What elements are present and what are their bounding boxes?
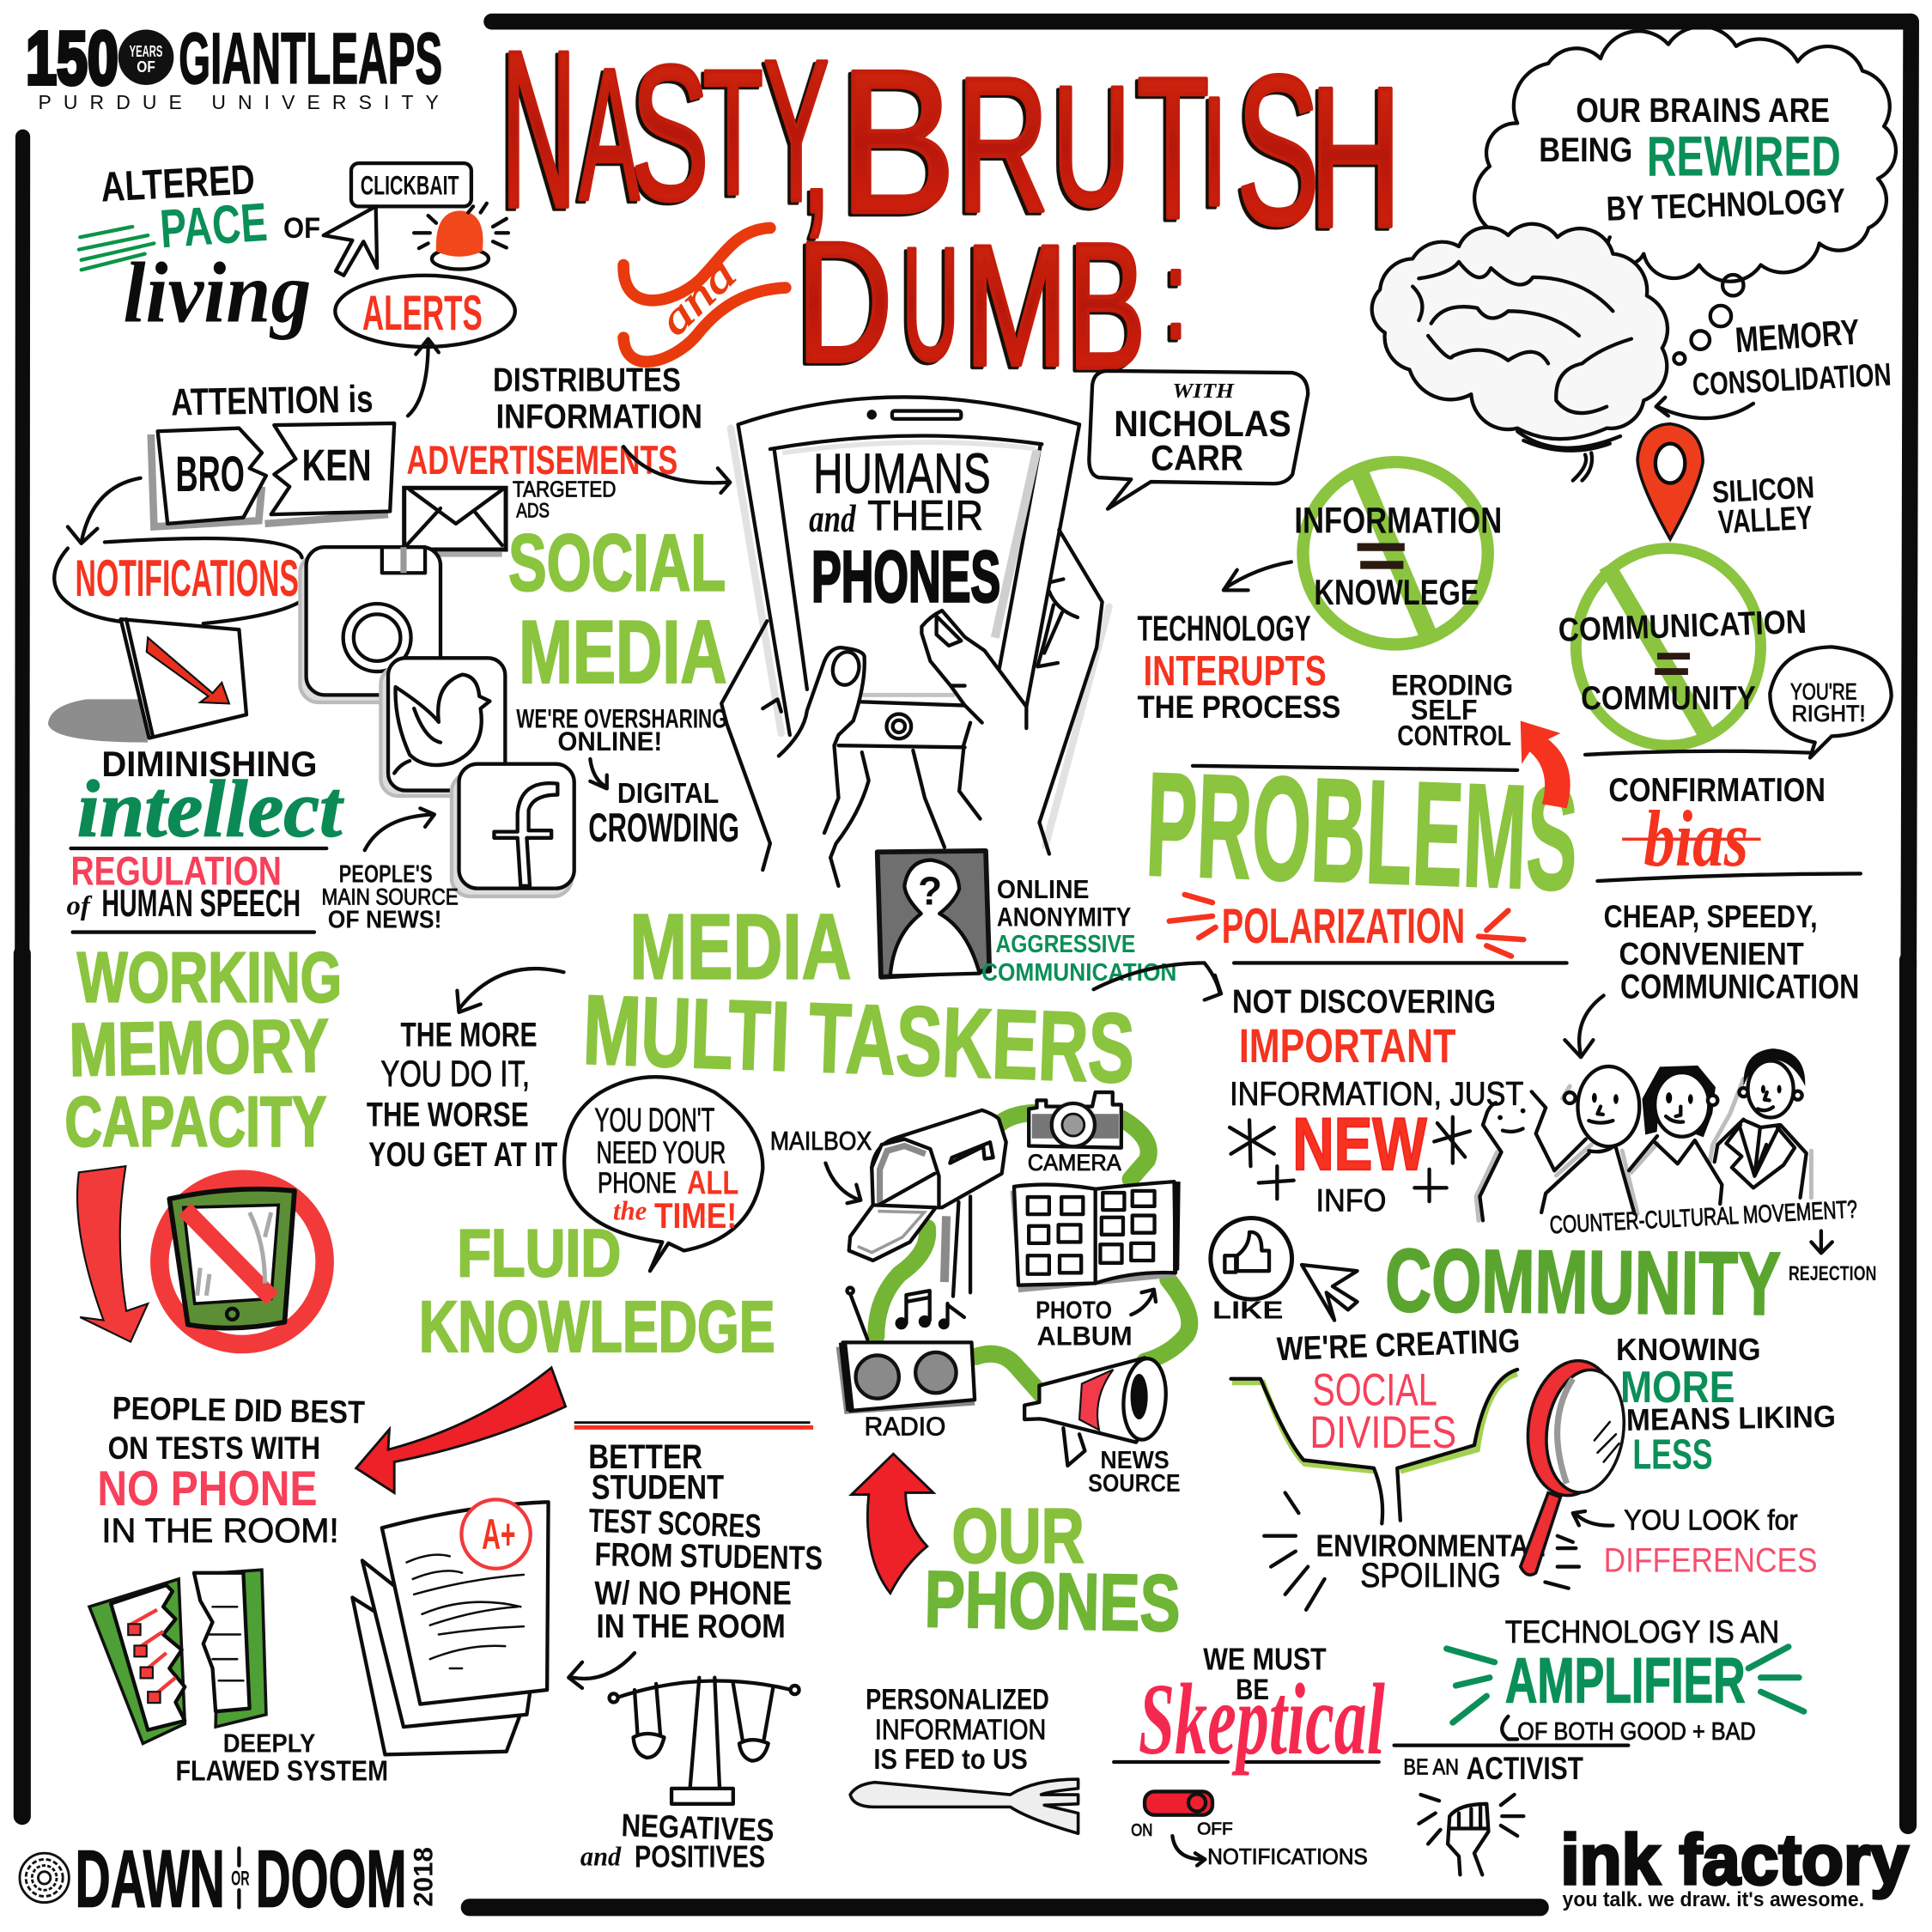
text: we must be skeptical: WE MUST [1203, 1642, 1327, 1676]
title: Nasty, Brutish: Y [763, 18, 829, 243]
speech bubble: you're right: YOU'RE [1790, 677, 1857, 704]
text: be an activist: ACTIVIST [1467, 1750, 1583, 1786]
heading: social media [508, 518, 727, 702]
text: diminishing intellect regulation: of [66, 890, 93, 920]
text: rejection: REJECTION [1789, 1262, 1876, 1285]
illustration: hands holding phone [721, 397, 1109, 886]
text: the more you do it: THE WORSE [367, 1096, 529, 1134]
heading: fluid knowledge: FLUID [457, 1217, 621, 1291]
text: you look for differences: YOU LOOK for [1624, 1504, 1798, 1536]
frame: bottom border left [470, 1895, 1540, 1919]
title: Nasty, Brutish: , [801, 33, 832, 253]
title: Nasty, Brutish [501, 4, 1401, 269]
text: targeted ads: ADS [516, 500, 550, 523]
frame: right border lower [1896, 960, 1920, 1826]
text: digital crowding: CROWDING [588, 805, 739, 851]
sign: information is not knowledge: KNOWLEGE [1314, 572, 1479, 612]
label: photo album [1036, 1290, 1156, 1351]
text: distributes information [493, 362, 702, 436]
logo: dawn or doom: OR [231, 1868, 250, 1891]
text: people's main source of news: OF NEWS! [328, 907, 441, 934]
arrow: broken to notifications [68, 478, 141, 544]
text: altered pace of living: PACE [158, 192, 270, 259]
icon: graded paper stack [352, 1499, 549, 1754]
speech bubble: with Nicholas Carr [1089, 371, 1308, 509]
icon: envelope [404, 488, 506, 555]
text: diminishing intellect regulation: DIMINISHING [101, 744, 318, 784]
icon: photo album [1011, 1182, 1179, 1292]
text: targeted ads [513, 477, 617, 523]
label: alerts: ALERTS [362, 286, 483, 341]
text: not discovering important: NEW [1292, 1103, 1427, 1186]
heading: problems [1144, 742, 1580, 921]
text: advertisements: ADVERTISEMENTS [407, 438, 677, 483]
text: digital crowding [588, 777, 739, 851]
speech bubble: with Nicholas Carr: CARR [1151, 437, 1243, 477]
text: deeply flawed system: FLAWED SYSTEM [175, 1755, 388, 1787]
label: news source [1088, 1447, 1181, 1498]
logo: 150 years of giant leaps: PURDUE UNIVERSITY [38, 91, 439, 113]
text: environmental spoiling [1316, 1528, 1545, 1595]
label: notifications: NOTIFICATIONS [76, 549, 299, 607]
speech bubble: you don't need your phone: PHONE [598, 1167, 677, 1200]
illustration: hands holding phone: and [809, 496, 856, 540]
text: better student test scores: TEST SCORES [588, 1503, 762, 1546]
text: the more you do it: YOU GET AT IT [368, 1135, 558, 1174]
label: like: LIKE [1212, 1297, 1284, 1324]
text: we're creating social divides: WE'RE CREATING [1276, 1322, 1521, 1368]
label: clickbait [351, 163, 471, 206]
heading: social media: MEDIA [519, 603, 727, 702]
text: media multitaskers: MEDIA [629, 895, 852, 998]
text: cheap speedy convenient: CHEAP, SPEEDY, [1604, 898, 1818, 934]
label: news source: SOURCE [1088, 1470, 1181, 1498]
text: altered pace of living [79, 156, 320, 341]
speech bubble: you're right: RIGHT! [1791, 700, 1866, 726]
sign: information is not knowledge: INFORMATION [1294, 501, 1502, 542]
icon: no phone sign [160, 1179, 325, 1345]
speech bubble: you don't need your phone: TIME! [654, 1195, 737, 1236]
text: confirmation bias: CONFIRMATION [1608, 772, 1826, 809]
text: we're creating social divides: DIVIDES [1309, 1407, 1456, 1458]
title: Nasty, Brutish: I [1201, 66, 1227, 238]
icon: music notes [897, 1291, 964, 1327]
text: technology interupts the process [1137, 608, 1340, 725]
text: technology is an amplifier: OF BOTH GOOD + BAD [1517, 1718, 1756, 1746]
text: digital crowding: DIGITAL [617, 777, 719, 809]
icon: red up arrow [852, 1454, 933, 1593]
text: be an activist [1403, 1750, 1583, 1786]
thought cloud: brains rewired [1474, 27, 1896, 282]
heading: fluid knowledge: KNOWLEDGE [419, 1285, 775, 1367]
text: knowing more means liking less: MORE [1620, 1362, 1735, 1412]
speech bubble: you don't need your phone: NEED YOUR [597, 1136, 726, 1170]
icon: thought bubbles [1674, 275, 1743, 364]
text: not discovering important: NOT DISCOVERING [1232, 984, 1496, 1021]
heading: social media: SOCIAL [508, 518, 726, 607]
text: better student test scores [588, 1437, 823, 1645]
text: we must be skeptical: BE [1236, 1674, 1269, 1706]
text: knowing more means liking less: MEANS LIKING [1626, 1400, 1836, 1437]
text: media multitaskers [581, 895, 1136, 1104]
label: photo album: ALBUM [1037, 1320, 1133, 1351]
label: notifications [54, 538, 302, 623]
text: negatives and positives [580, 1807, 775, 1874]
thought cloud: brains rewired: REWIRED [1647, 124, 1841, 187]
text: oversharing online: ONLINE! [557, 726, 662, 756]
icon: torn checklist [89, 1570, 266, 1743]
text: we must be skeptical: Skeptical [1139, 1663, 1385, 1776]
heading: community: COMMUNITY [1385, 1231, 1781, 1334]
title: Dumb: : [1164, 224, 1188, 365]
text: altered pace of living: living [123, 245, 311, 341]
logo: ink factory: you talk. we draw. it's awesome. [1563, 1889, 1864, 1911]
title: Nasty, Brutish: S [631, 27, 709, 240]
arrow: communication to people [1564, 995, 1604, 1057]
text: people did best: NO PHONE [97, 1461, 318, 1516]
text: diminishing intellect regulation: intellect [77, 765, 344, 854]
text: better student test scores: W/ NO PHONE [594, 1575, 792, 1612]
text: negatives and positives: POSITIVES [635, 1840, 765, 1874]
text: knowing more means liking less [1616, 1333, 1836, 1478]
heading: working memory capacity: CAPACITY [64, 1083, 326, 1162]
title: Nasty, Brutish: B [839, 28, 957, 256]
text: people did best: ON TESTS WITH [108, 1430, 320, 1466]
text: eroding self control: CONTROL [1397, 720, 1511, 751]
speech bubble: you don't need your phone: YOU DON'T [594, 1102, 714, 1139]
speech bubble: you don't need your phone: ALL [687, 1164, 738, 1201]
heading: working memory capacity: WORKING [77, 939, 342, 1018]
text: not discovering important: IMPORTANT [1239, 1018, 1455, 1072]
text: online anonymity aggressive communication: COMMUNICATION [981, 959, 1176, 987]
frame: top and left marker border [22, 21, 1910, 966]
text: knowing more means liking less: LESS [1632, 1431, 1713, 1478]
label: photo album: PHOTO [1036, 1297, 1112, 1324]
speech bubble: with Nicholas Carr: WITH [1172, 380, 1235, 403]
online anonymity icon: ? [918, 868, 942, 913]
text: deeply flawed system: DEEPLY [223, 1730, 315, 1759]
text: on off notifications [1131, 1820, 1368, 1869]
text: better student test scores: FROM STUDENTS [594, 1536, 823, 1577]
logo: dawn or doom [20, 1834, 439, 1925]
divider under community sign [1585, 751, 1814, 755]
illustration: hands holding phone: THEIR [867, 493, 983, 539]
heading: our phones: PHONES [924, 1554, 1181, 1648]
text: online anonymity aggressive communication: ONLINE [997, 876, 1090, 904]
text: better student test scores: STUDENT [592, 1468, 724, 1507]
thought cloud: brains rewired: BY TECHNOLOGY [1606, 181, 1846, 228]
illustration: hands holding phone: PHONES [811, 535, 1000, 617]
text: we're creating social divides: SOCIAL [1312, 1365, 1437, 1416]
text: the more you do it: YOU DO IT, [380, 1054, 530, 1095]
speech bubble: you don't need your phone: the [613, 1196, 647, 1226]
text: silicon valley: SILICON [1711, 470, 1815, 509]
text: polarization: POLARIZATION [1222, 899, 1465, 954]
logo: ink factory: ink factory [1560, 1820, 1909, 1899]
broken box: BRO KEN: KEN [302, 440, 372, 490]
text: environmental spoiling: SPOILING [1360, 1556, 1501, 1595]
title: Dumb: D [797, 206, 893, 398]
heading: fluid knowledge [419, 1217, 775, 1367]
logo: 150 years of giant leaps: OF [137, 58, 155, 76]
title: Nasty, Brutish: A [579, 31, 640, 240]
text: people's main source of news [322, 860, 459, 934]
label: clickbait: CLICKBAIT [361, 170, 459, 201]
text: oversharing online: WE'RE OVERSHARING [516, 702, 727, 733]
burst lines: environmental spoiling [1264, 1492, 1579, 1610]
text: technology is an amplifier [1394, 1613, 1804, 1746]
arrow: consolidation to brain [1656, 398, 1753, 418]
heading: working memory capacity [64, 939, 342, 1162]
text: on off notifications: ON [1131, 1821, 1152, 1840]
title: Dumb [797, 206, 1188, 406]
logo: dawn or doom: DAWN [76, 1834, 225, 1925]
online anonymity icon [878, 851, 989, 977]
arrow: media to the more you do it [457, 969, 564, 1012]
text: memory consolidation [1692, 311, 1893, 403]
text: eroding self control: ERODING [1391, 669, 1513, 702]
text: memory consolidation: MEMORY [1734, 311, 1861, 360]
label: radio: RADIO [865, 1413, 945, 1442]
icon: magnifying glass [1520, 1355, 1631, 1575]
text: online anonymity aggressive communication: ANONYMITY [997, 901, 1131, 932]
text: attention is: ATTENTION is [171, 378, 374, 424]
top-right region [1089, 21, 1911, 972]
text: better student test scores: IN THE ROOM [597, 1608, 786, 1645]
icon: sparkle stars [1230, 1117, 1470, 1201]
icon: cursor arrow [324, 206, 377, 276]
title: Dumb: B [1067, 206, 1146, 406]
text: be an activist: BE AN [1403, 1755, 1459, 1779]
bottom-right region [1011, 960, 1909, 1911]
arrow: problems to eroding self control [1521, 720, 1571, 808]
text: cheap speedy convenient [1604, 898, 1818, 972]
green ribbon connecting phone features [876, 1113, 1189, 1394]
text: online anonymity aggressive communication: AGGRESSIVE [995, 931, 1135, 958]
text: eroding self control [1391, 669, 1513, 751]
text: on off notifications: NOTIFICATIONS [1207, 1845, 1368, 1869]
text: technology interupts the process: TECHNOLOGY [1137, 608, 1311, 648]
title: Nasty, Brutish: S [1236, 33, 1320, 269]
title: Nasty, Brutish: N [501, 4, 577, 254]
text: distributes information: DISTRIBUTES [493, 362, 681, 399]
icon: instagram [300, 547, 440, 702]
arrow: room to paper [568, 1653, 635, 1688]
logo: 150 years of giant leaps [26, 16, 442, 113]
arrow: advertisements to phone [623, 447, 730, 493]
icon: graded paper stack: A+ [482, 1510, 516, 1558]
arrow: you look for [1573, 1511, 1613, 1526]
text: distributes information: INFORMATION [496, 398, 702, 436]
sign: information is not knowledge [1294, 462, 1502, 645]
text: knowing more means liking less: KNOWING [1616, 1333, 1761, 1367]
text: cheap speedy convenient: CONVENIENT [1619, 936, 1804, 972]
text: better student test scores: BETTER [588, 1437, 702, 1476]
sign: communication is not community: COMMUNITY [1581, 680, 1756, 717]
icon: balance scale [610, 1678, 799, 1804]
text: technology is an amplifier: AMPLIFIER [1505, 1643, 1746, 1716]
text: diminishing intellect regulation: REGULATION [71, 848, 282, 894]
logo: 150 years of giant leaps: 150 [26, 16, 118, 100]
text: negatives and positives: and [580, 1842, 622, 1872]
text: people did best: IN THE ROOM! [101, 1511, 339, 1550]
icon: cursor [1302, 1265, 1358, 1321]
text: personalized information: INFORMATION [875, 1713, 1046, 1745]
text: silicon valley [1711, 470, 1815, 541]
title: Dumb: M [965, 210, 1067, 402]
title: Dumb: U [902, 214, 959, 393]
heading: our phones: OUR [952, 1494, 1084, 1580]
icon: mailbox [849, 1110, 1006, 1297]
arrow: movement to rejection [1811, 1231, 1832, 1253]
title: and ribbon: and [650, 250, 746, 345]
text: eroding self control: SELF [1411, 694, 1478, 726]
arrow: mailbox label [825, 1163, 860, 1203]
speech bubble: you don't need your phone [564, 1077, 762, 1271]
text: you look for differences [1604, 1504, 1818, 1579]
illustration: social divide canyon [1231, 1370, 1517, 1523]
title: Nasty, Brutish: H [1309, 46, 1401, 269]
logo: 150 years of giant leaps: YEARS [130, 42, 162, 60]
label: mailbox: MAILBOX [770, 1127, 872, 1156]
icon: twitter [380, 658, 505, 796]
label: alerts [335, 276, 515, 347]
text: on off notifications: OFF [1197, 1820, 1233, 1839]
heading: our phones [924, 1494, 1181, 1648]
title: and ribbon [623, 228, 786, 361]
icon: gray smudge and tablet with red arrow [48, 619, 246, 743]
text: people's main source of news: PEOPLE'S [339, 860, 433, 888]
frame: right border [1909, 21, 1911, 966]
icon: location pin [1637, 424, 1703, 539]
text: oversharing online [516, 702, 727, 756]
icon: camera [1029, 1092, 1121, 1148]
text: personalized information [866, 1683, 1049, 1775]
text: the more you do it: THE MORE [400, 1015, 538, 1054]
text: not discovering important [1230, 984, 1523, 1218]
arrow: big red arrow left [356, 1368, 566, 1492]
speech bubble: with Nicholas Carr: NICHOLAS [1114, 404, 1291, 445]
text: diminishing intellect regulation [66, 744, 344, 933]
text: altered pace of living: ALTERED [100, 156, 256, 211]
text: diminishing intellect regulation: HUMAN SPEECH [101, 883, 301, 925]
text: technology interupts the process: THE PROCESS [1137, 689, 1340, 725]
sign: communication is not community: COMMUNICATION [1558, 604, 1807, 649]
illustration: hands holding phone: HUMANS [813, 441, 991, 505]
text: silicon valley: VALLEY [1717, 500, 1814, 541]
text: people's main source of news: MAIN SOURCE [322, 883, 459, 909]
text: polarization [1170, 895, 1567, 963]
title: Nasty, Brutish: R [957, 38, 1049, 252]
logo: dawn or doom: 2018 [408, 1847, 439, 1907]
frame: left border lower [10, 954, 34, 1816]
broken box: BRO KEN [151, 423, 394, 526]
arrow: oversharing to digital crowding [590, 759, 607, 788]
icon: radio [839, 1288, 975, 1411]
text: technology is an amplifier: TECHNOLOGY IS AN [1505, 1613, 1779, 1649]
divider: red and black line [574, 1423, 813, 1427]
label: camera: CAMERA [1028, 1149, 1122, 1176]
top-left region [22, 4, 1910, 966]
arrow: people's main source to facebook [365, 808, 434, 850]
text: we must be skeptical [1114, 1642, 1385, 1776]
text: deeply flawed system [175, 1730, 388, 1787]
title: Nasty, Brutish: T [703, 33, 763, 231]
icon: red down arrow [77, 1166, 148, 1342]
text: you look for differences: DIFFERENCES [1604, 1540, 1818, 1579]
text: we're creating social divides [1276, 1322, 1521, 1458]
text: communication: COMMUNICATION [1620, 967, 1859, 1005]
text: personalized information: IS FED to US [873, 1743, 1028, 1775]
bottom-left region [20, 851, 1540, 1925]
text: confirmation bias [1597, 772, 1861, 884]
text: online anonymity aggressive communication [981, 876, 1176, 987]
text: media multitaskers: MULTI TASKERS [581, 975, 1136, 1104]
text: not discovering important: INFORMATION, JUST [1230, 1076, 1523, 1113]
text: technology interupts the process: INTERUPTS [1144, 648, 1327, 695]
text: environmental spoiling: ENVIRONMENTAL [1316, 1528, 1545, 1563]
text: people did best: PEOPLE DID BEST [112, 1389, 365, 1430]
icon: like thumb [1211, 1218, 1292, 1299]
text: negatives and positives: NEGATIVES [621, 1807, 775, 1848]
text: people did best [97, 1389, 365, 1550]
title: Nasty, Brutish: U [1052, 51, 1131, 240]
illustration: brain [1372, 224, 1668, 481]
heading: working memory capacity: MEMORY [69, 1003, 330, 1092]
title: Nasty, Brutish: T [1137, 35, 1209, 260]
icon: news megaphone [1024, 1357, 1170, 1466]
arrow: aggressive communication to not discovering [1094, 963, 1221, 999]
thought cloud: brains rewired: OUR BRAINS ARE [1576, 91, 1830, 130]
icon: toggle switch [1145, 1791, 1212, 1815]
logo: 150 years of giant leaps: GIANTLEAPS [179, 17, 442, 99]
text: confirmation bias: bias [1643, 795, 1748, 884]
label: news source: NEWS [1100, 1447, 1170, 1474]
text: targeted ads: TARGETED [513, 477, 616, 501]
icon: facebook [452, 764, 574, 896]
sign: communication is not community [1558, 549, 1807, 745]
icon: fork [850, 1779, 1078, 1833]
icon: raised fist [1419, 1795, 1523, 1874]
text: not discovering important: INFO [1316, 1182, 1386, 1218]
text: altered pace of living: OF [283, 212, 320, 245]
text: the more you do it [367, 1015, 558, 1174]
illustration: counter-cultural people [1476, 1048, 1811, 1220]
icon: alarm siren [414, 204, 508, 270]
logo: dawn or doom: DOOM [256, 1834, 407, 1925]
thought cloud: brains rewired: BEING [1539, 131, 1632, 169]
broken box: BRO KEN: BRO [175, 447, 245, 502]
text: personalized information: PERSONALIZED [866, 1683, 1049, 1716]
arrow: attention to alerts [408, 339, 439, 416]
arrow: information to technology [1224, 562, 1291, 590]
speech bubble: you're right [1770, 647, 1892, 758]
